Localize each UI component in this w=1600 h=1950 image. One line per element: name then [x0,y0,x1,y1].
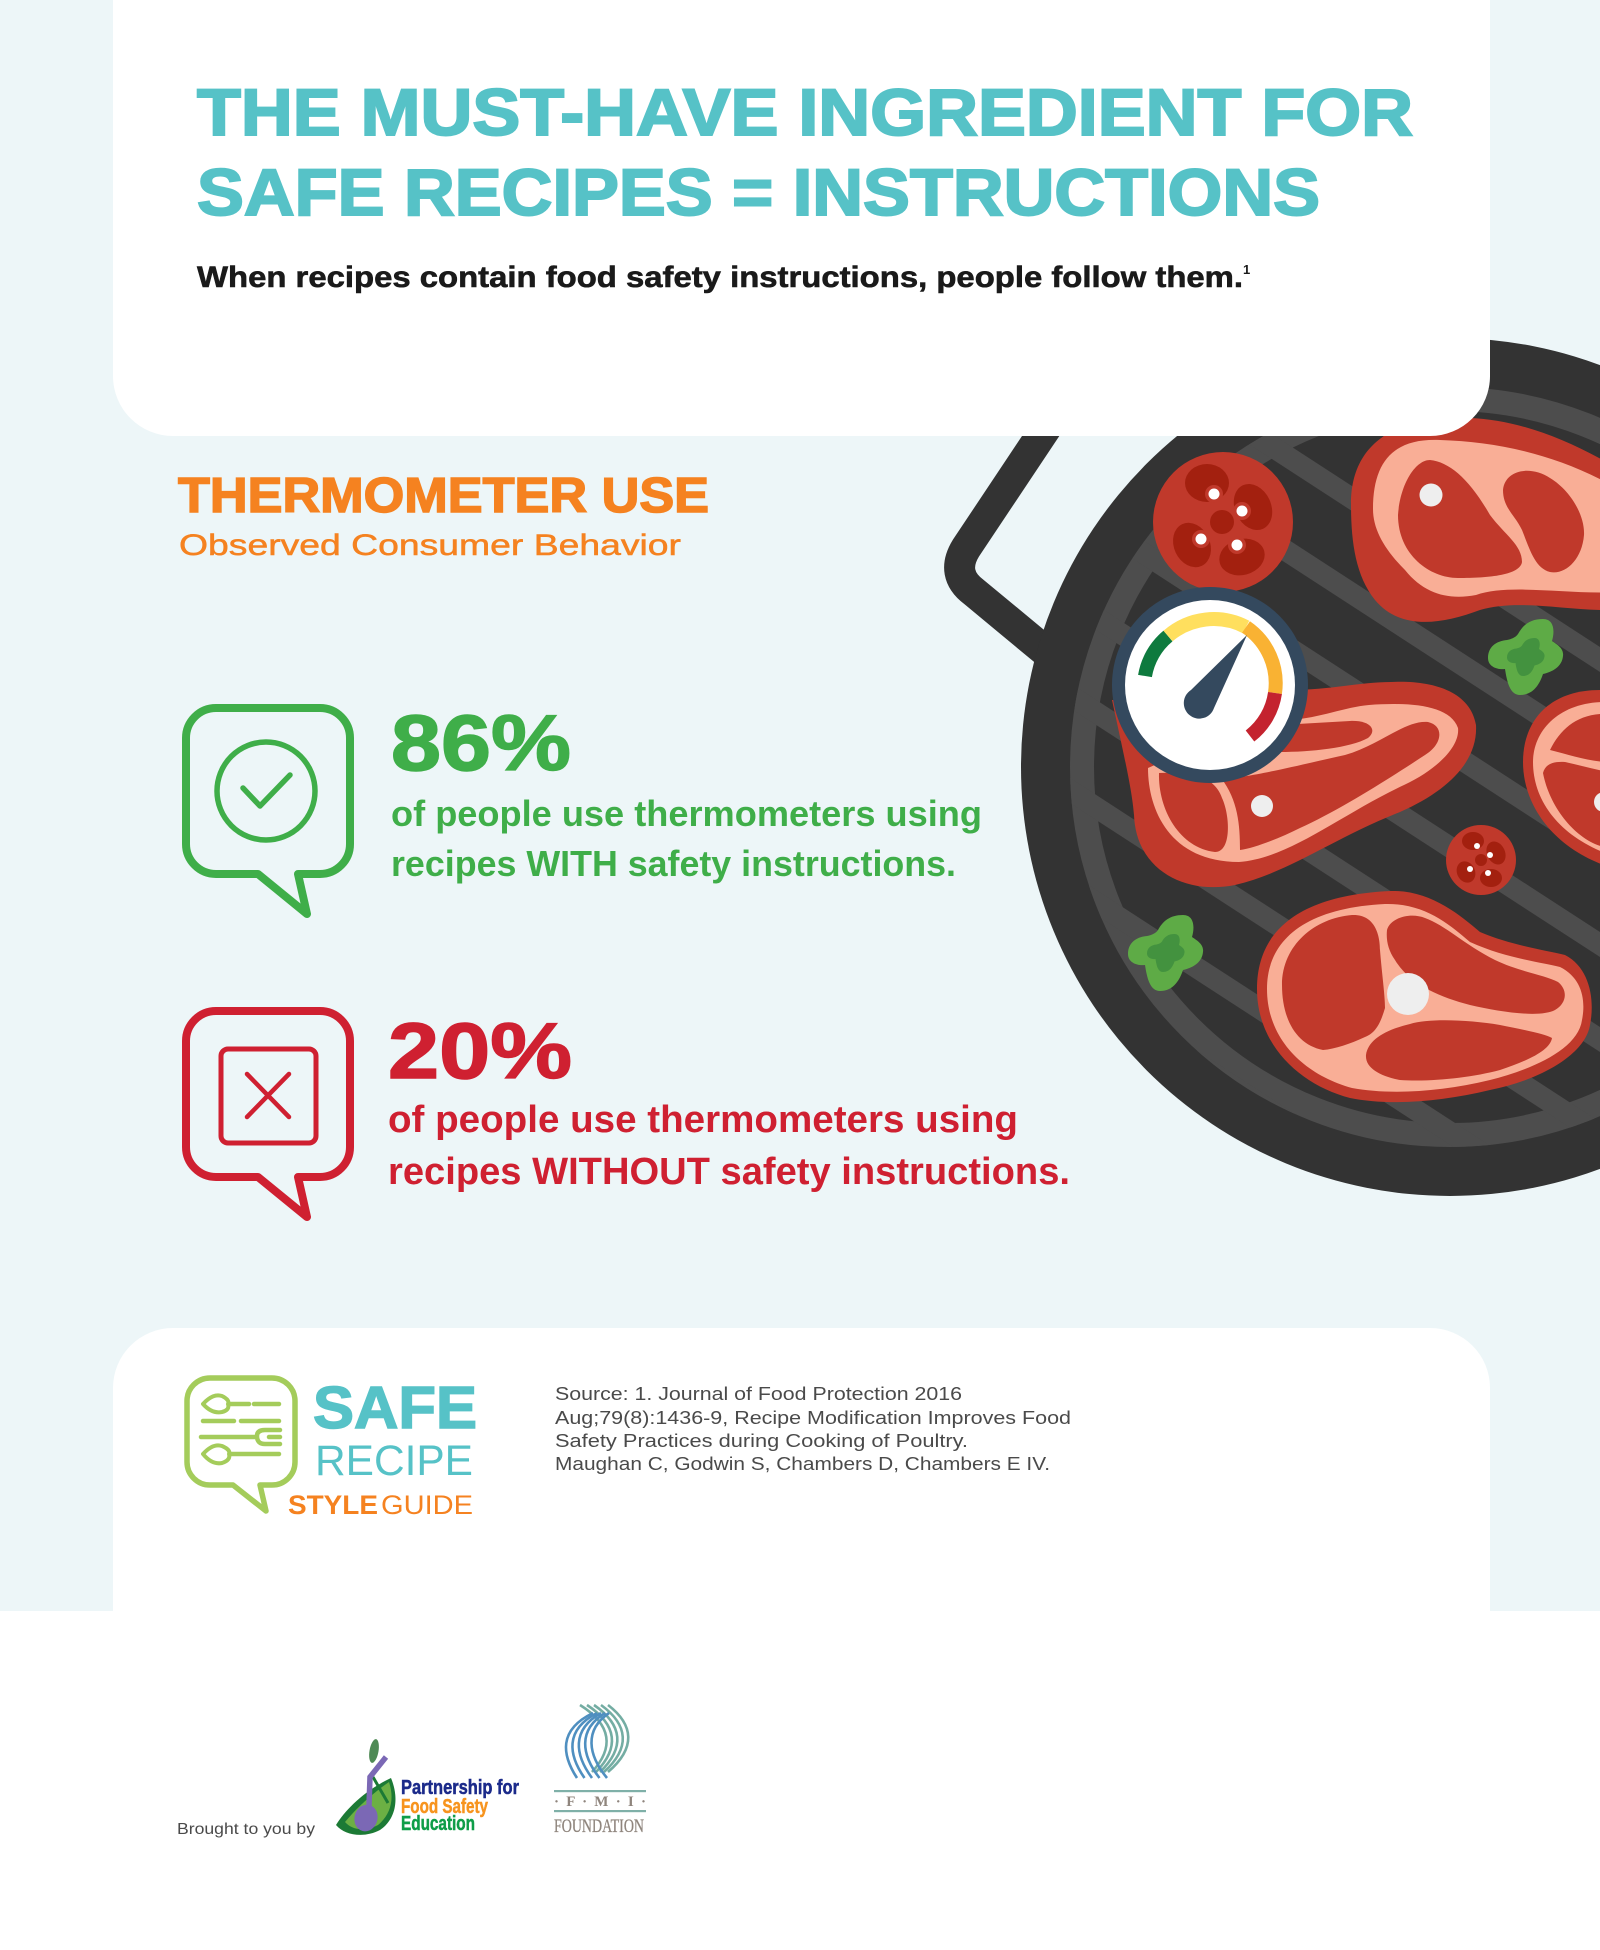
stat: 20 percent: of people use thermometers using [388,1099,1018,1141]
tomato slice: large [1153,452,1293,592]
icon: herb leaf lower [1128,915,1203,991]
icon: thermometer dial [1112,587,1308,783]
heading: thermometer use: Observed Consumer Behavior [179,529,681,562]
heading: thermometer use: THERMOMETER USE [178,469,709,523]
panel: header [113,0,1490,436]
logo: partnership for food safety education: Food Safety [401,1796,489,1818]
source text [555,1384,1071,1474]
illustration: grill with meat [944,340,1600,1196]
title: THE MUST-HAVE INGREDIENT FOR [197,75,1413,149]
stat: 86 percent [391,698,982,884]
grill body [1021,340,1600,1196]
stat: 20 percent [388,1006,1070,1193]
stat: 20 percent: 20% [388,1006,572,1095]
icon: leaf and spoon [336,1738,395,1835]
source text: Aug;79(8):1436-9, Recipe Modification Improves Food [555,1408,1071,1428]
heading: thermometer use [178,469,709,562]
logo: safe recipe style guide: STYLE [288,1490,378,1520]
tomato slice: small [1446,825,1516,895]
logo: fmi foundation [554,1705,646,1837]
logo: partnership for food safety education: Education [401,1813,475,1835]
source text: Safety Practices during Cooking of Poultry. [555,1431,968,1451]
subtitle: When recipes contain food safety instructions, people follow them. [197,261,1243,294]
stat: 86 percent: recipes WITH safety instructions. [391,843,956,884]
icon: recipe speech bubble [187,1378,295,1511]
logo: partnership for food safety education [336,1738,519,1835]
logo: partnership for food safety education: Partnership for [401,1777,519,1799]
stat: 86 percent: 86% [391,698,571,787]
stat: 20 percent: recipes WITHOUT safety instructions. [388,1151,1070,1193]
meat: top right steak [1351,418,1600,622]
stat: 86 percent: of people use thermometers using [391,793,982,834]
logo: fmi foundation: · F · M · I · [554,1794,646,1810]
logo: safe recipe style guide: GUIDE [381,1490,473,1520]
grill handle [960,407,1060,655]
icon: fmi ribbons [566,1705,628,1778]
icon: herb leaf upper [1488,619,1563,695]
logo: safe recipe style guide: SAFE [313,1375,477,1441]
logo: fmi foundation: FOUNDATION [554,1816,644,1837]
logo: safe recipe style guide: RECIPE [315,1437,473,1485]
subtitle: 1 [1243,262,1250,277]
title [197,75,1413,229]
icon: green speech bubble with check [186,708,350,914]
title: SAFE RECIPES = INSTRUCTIONS [197,155,1320,229]
logo: safe recipe style guide [187,1375,477,1520]
source text: Maughan C, Godwin S, Chambers D, Chambers E IV. [555,1454,1050,1474]
meat: bottom steak [1257,891,1592,1102]
panel: footer source [113,1328,1490,1611]
icon: red speech bubble with x [186,1011,350,1217]
meat: right edge steak [1523,690,1600,870]
meat: T-bone under thermometer [1112,682,1476,887]
brought to you by: Brought to you by [177,1821,315,1838]
source text: Source: 1. Journal of Food Protection 2016 [555,1384,962,1404]
